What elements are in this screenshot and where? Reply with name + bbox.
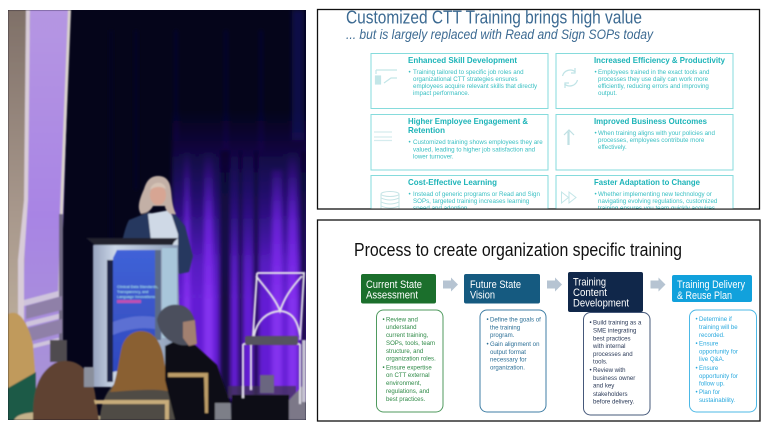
card: higher employee engagement and retention: valued, leading to higher job satisfaction and bbox=[413, 146, 536, 154]
card: enhanced skill development bbox=[371, 54, 548, 108]
card: faster adaptation to change: navigating evolving regulations, customized bbox=[598, 198, 718, 205]
details: future state: Gain alignment on bbox=[490, 341, 539, 348]
icon: double chevrons bbox=[562, 192, 576, 203]
details: current state: structure, and bbox=[386, 348, 423, 355]
card: cost-effective learning: SOPs, targeted training increases learning bbox=[413, 198, 530, 205]
details: current state: understand bbox=[386, 324, 416, 331]
panel: customized training value slide bbox=[318, 8, 760, 230]
card: improved business outcomes: Improved Business Outcomes bbox=[594, 117, 707, 126]
details: delivery and reuse: • bbox=[696, 316, 698, 323]
details: future state: Define the goals of bbox=[490, 316, 541, 324]
details: delivery and reuse bbox=[690, 310, 756, 412]
details: content development: with internal bbox=[592, 343, 626, 350]
card: increased efficiency and productivity: processes they use daily can work more bbox=[598, 76, 709, 83]
arrow bbox=[443, 278, 458, 292]
details: content development: best practices bbox=[593, 336, 631, 342]
details: content development: processes and bbox=[593, 351, 633, 358]
details: future state: necessary for bbox=[490, 356, 527, 364]
card: cost-effective learning: Cost-Effective Learning bbox=[408, 178, 497, 187]
details: future state bbox=[480, 310, 546, 412]
details: content development: • bbox=[590, 320, 592, 326]
details: content development: • bbox=[590, 367, 592, 374]
card: improved business outcomes: processes, employees contribute more bbox=[598, 137, 705, 144]
card: higher employee engagement and retention: Retention bbox=[408, 126, 445, 135]
details: delivery and reuse: live Q&A. bbox=[699, 356, 725, 363]
details: future state: • bbox=[486, 316, 489, 324]
details: future state: program. bbox=[490, 332, 515, 339]
step: training delivery and reuse plan bbox=[672, 275, 752, 302]
icon: horizontal lines bbox=[374, 132, 392, 140]
details: current state: environment, bbox=[386, 380, 422, 387]
card: improved business outcomes bbox=[556, 114, 733, 170]
card: increased efficiency and productivity: output. bbox=[598, 90, 617, 97]
card: faster adaptation to change: • bbox=[594, 191, 597, 198]
details: current state: on CTT external bbox=[386, 372, 430, 379]
details: delivery and reuse: • bbox=[696, 340, 698, 348]
step: training content development: Development bbox=[573, 298, 629, 310]
card: faster adaptation to change: Whether implementing new technology or bbox=[598, 191, 712, 198]
card: cost-effective learning bbox=[370, 175, 548, 208]
details: delivery and reuse: opportunity for bbox=[699, 348, 738, 356]
step: training content development: Training bbox=[573, 276, 606, 288]
details: delivery and reuse: • bbox=[696, 389, 698, 396]
details: current state: best practices. bbox=[386, 396, 426, 403]
photo: speaker at podium on stage: Language Innovations bbox=[117, 295, 155, 299]
details: current state: Ensure expertise bbox=[386, 364, 432, 372]
details: delivery and reuse: Determine if bbox=[699, 316, 732, 323]
icon: stack of coins bbox=[381, 192, 399, 209]
details: content development: and key bbox=[593, 382, 615, 390]
step: current state assessment bbox=[361, 274, 436, 304]
details: content development: before delivery. bbox=[593, 398, 635, 406]
details: delivery and reuse: follow up. bbox=[699, 380, 725, 388]
card: enhanced skill development: impact performance. bbox=[413, 90, 470, 97]
details: delivery and reuse: • bbox=[696, 365, 698, 372]
step: training delivery and reuse plan: & Reuse Plan bbox=[677, 290, 732, 302]
icon: up arrow bbox=[564, 130, 574, 145]
card: higher employee engagement and retention: lower turnover. bbox=[413, 154, 454, 160]
details: content development: SME integrating bbox=[593, 328, 636, 334]
details: delivery and reuse: sustainability. bbox=[699, 397, 735, 404]
card: faster adaptation to change: training ensures you team quickly acquires bbox=[598, 205, 715, 212]
card: improved business outcomes: effectively. bbox=[598, 144, 627, 151]
photo: speaker at podium on stage: Transparency, and bbox=[117, 290, 148, 294]
details: content development bbox=[584, 312, 650, 415]
arrow bbox=[547, 278, 562, 292]
card: cost-effective learning: • bbox=[408, 191, 411, 198]
panel: process slide bbox=[318, 220, 760, 421]
card: faster adaptation to change bbox=[556, 175, 734, 208]
card: improved business outcomes: When training aligns with your policies and bbox=[598, 130, 715, 137]
card: enhanced skill development: organizational CTT strategies ensures bbox=[413, 76, 517, 83]
icon: chart and check bbox=[376, 70, 397, 84]
slide subtitle: ... but is largely replaced with Read and Sign SOPs today bbox=[346, 27, 654, 42]
slide title: Customized CTT Training brings high value bbox=[346, 8, 642, 28]
details: future state: the training bbox=[490, 324, 520, 332]
details: delivery and reuse: Ensure bbox=[699, 365, 719, 372]
details: delivery and reuse: training will be bbox=[699, 324, 738, 331]
arrow bbox=[650, 278, 666, 292]
card: increased efficiency and productivity bbox=[556, 54, 733, 108]
card: enhanced skill development: employees acquire relevant skills that directly bbox=[413, 83, 538, 90]
card: enhanced skill development: • bbox=[408, 69, 411, 76]
details: delivery and reuse: opportunity for bbox=[699, 373, 738, 380]
card: enhanced skill development: Training tailored to specific job roles and bbox=[413, 69, 524, 76]
details: content development: Build training as a bbox=[593, 320, 642, 326]
card: higher employee engagement and retention: Higher Employee Engagement & bbox=[408, 117, 528, 126]
details: current state: organization roles. bbox=[386, 356, 436, 362]
card: higher employee engagement and retention: • bbox=[408, 139, 411, 146]
details: current state: regulations, and bbox=[386, 388, 429, 395]
card: increased efficiency and productivity: • bbox=[594, 69, 597, 76]
card: faster adaptation to change: Faster Adaptation to Change bbox=[594, 178, 700, 187]
details: future state: output format bbox=[490, 349, 526, 356]
details: content development: Review with bbox=[593, 367, 626, 374]
card: increased efficiency and productivity: Employees trained in the exact tools and bbox=[598, 69, 710, 76]
step: future state vision bbox=[464, 274, 540, 304]
details: content development: stakeholders bbox=[593, 391, 628, 398]
details: current state: • bbox=[382, 364, 385, 372]
process title: Process to create organization specific training bbox=[354, 239, 682, 260]
card: increased efficiency and productivity: Increased Efficiency & Productivity bbox=[594, 56, 725, 65]
details: current state bbox=[376, 310, 443, 412]
photo: speaker at podium on stage bbox=[8, 10, 312, 420]
card: higher employee engagement and retention: Customized training shows employees they are bbox=[413, 139, 543, 146]
details: delivery and reuse: recorded. bbox=[699, 332, 725, 339]
icon: circular arrows bbox=[562, 68, 578, 88]
card: enhanced skill development: Enhanced Skill Development bbox=[408, 56, 517, 65]
step: future state vision: Vision bbox=[470, 290, 495, 302]
step: training content development bbox=[568, 272, 643, 312]
details: current state: current training, bbox=[386, 332, 429, 339]
details: delivery and reuse: Plan for bbox=[699, 389, 720, 396]
step: future state vision: Future State bbox=[470, 279, 521, 291]
card: cost-effective learning: speed and adoption. bbox=[413, 205, 469, 212]
step: current state assessment: Assessment bbox=[366, 290, 418, 302]
card: increased efficiency and productivity: efficiently, reducing errors and improving bbox=[598, 83, 709, 90]
details: current state: • bbox=[382, 316, 385, 324]
details: current state: SOPs, tools, team bbox=[386, 340, 435, 347]
photo: speaker at podium on stage: Clinical Data Standards, bbox=[117, 285, 158, 289]
details: future state: organization. bbox=[490, 364, 525, 372]
card: improved business outcomes: • bbox=[594, 130, 597, 137]
step: current state assessment: Current State bbox=[366, 279, 422, 291]
details: current state: Review and bbox=[386, 316, 418, 324]
step: training delivery and reuse plan: Training Delivery bbox=[677, 279, 746, 291]
card: cost-effective learning: Instead of generic programs or Read and Sign bbox=[413, 191, 540, 198]
details: future state: • bbox=[486, 341, 489, 348]
details: content development: tools. bbox=[593, 358, 608, 366]
card: higher employee engagement and retention bbox=[371, 114, 548, 170]
details: delivery and reuse: Ensure bbox=[699, 340, 719, 348]
step: training content development: Content bbox=[573, 287, 607, 299]
details: content development: business owner bbox=[593, 375, 635, 382]
